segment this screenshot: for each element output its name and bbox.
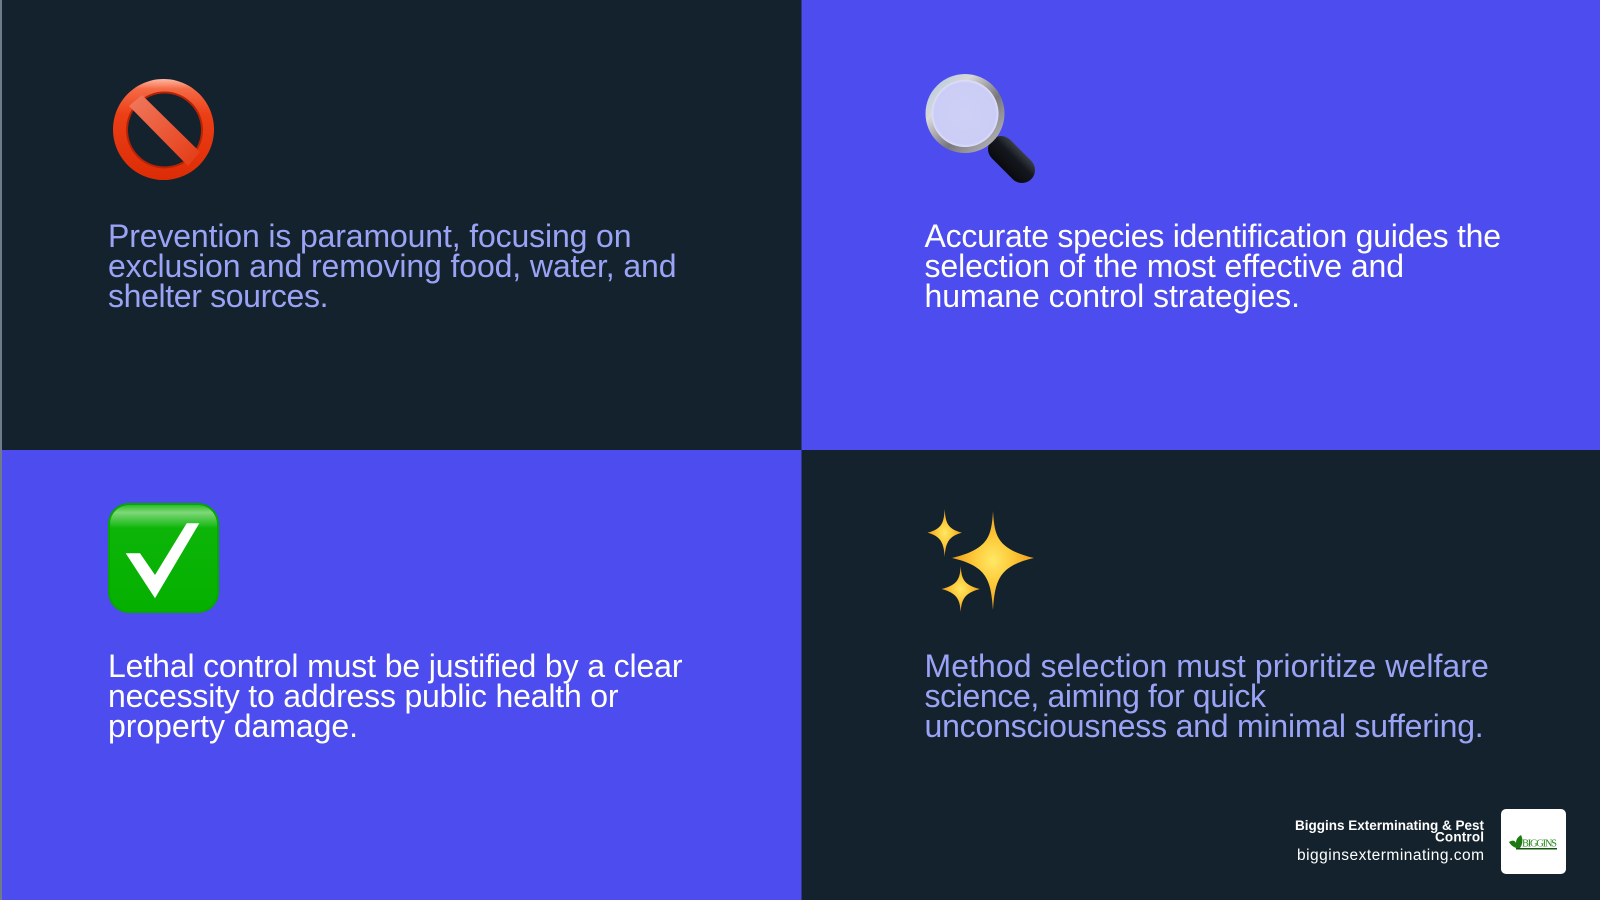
logo wordmark: BIGGINS	[1522, 838, 1557, 850]
text: method selection statement: Method selection must prioritize welfare	[924, 648, 1489, 684]
text: lethal control statement: Lethal control must be justified by a clear	[108, 648, 683, 684]
text: lethal control statement: necessity to address public health or	[108, 678, 619, 714]
panel: identification	[0, 0, 1600, 450]
left edge strip	[0, 0, 2, 900]
text: prevention statement: shelter sources.	[108, 278, 328, 314]
text: method selection statement: science, aiming for quick	[924, 678, 1267, 714]
brand footer	[1295, 809, 1566, 874]
company name: Control	[1435, 830, 1484, 844]
company name: Biggins Exterminating & Pest	[1295, 818, 1484, 833]
text: method selection statement: unconsciousness and minimal suffering.	[924, 708, 1484, 744]
text: lethal control statement: property damage.	[108, 708, 358, 744]
website address: bigginsexterminating.com	[1297, 847, 1484, 864]
text: identification statement: humane control strategies.	[924, 278, 1300, 314]
text: identification statement: selection of the most effective and	[924, 248, 1404, 284]
icon: sparkles	[928, 509, 1034, 612]
logo leaves	[1509, 835, 1522, 848]
logo badge	[1501, 809, 1566, 874]
text: prevention statement: exclusion and removing food, water, and	[108, 248, 676, 284]
panel: prevention	[109, 79, 674, 308]
icon: check mark button	[108, 503, 219, 613]
text: prevention statement: Prevention is paramount, focusing on	[108, 218, 632, 254]
text: identification statement: Accurate species identification guides the	[924, 218, 1501, 254]
icon: magnifying glass	[926, 74, 1022, 170]
panel: lethal control	[0, 0, 802, 900]
icon: prohibited sign	[113, 79, 214, 180]
